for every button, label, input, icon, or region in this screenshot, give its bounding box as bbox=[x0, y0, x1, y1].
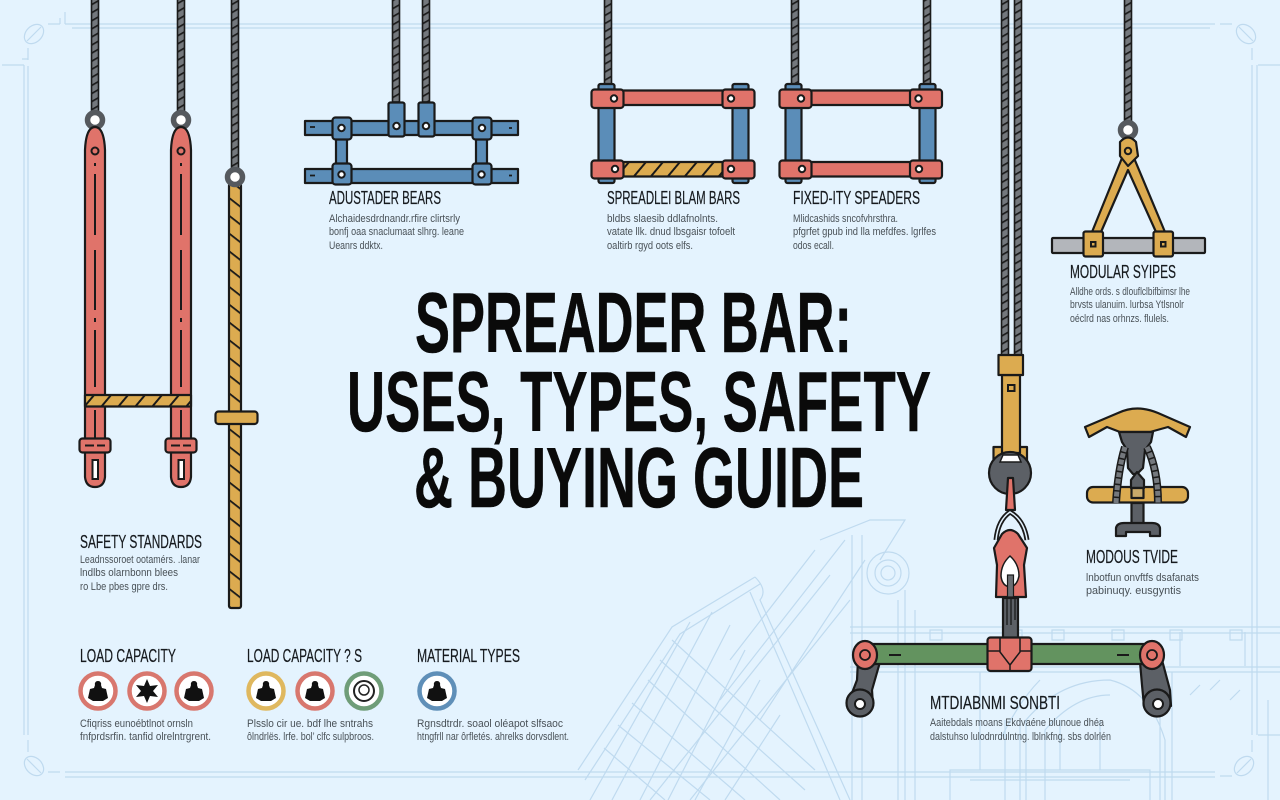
spreader beam bbox=[592, 0, 754, 252]
rope bbox=[604, 0, 612, 84]
label: ADUSTADER BEARS bbox=[329, 188, 441, 208]
description: Ueanrs ddktx. bbox=[329, 240, 383, 252]
centre pin bbox=[1131, 472, 1144, 488]
safety standards block bbox=[80, 532, 202, 593]
description: Leadnssoroet ootamérs. .lanar bbox=[80, 554, 200, 566]
description bbox=[247, 718, 374, 743]
description: lnbotfun onvftfs dsafanats bbox=[1086, 572, 1199, 584]
icon: green badge bbox=[346, 674, 382, 708]
ring bbox=[1120, 122, 1136, 138]
description bbox=[417, 718, 569, 743]
description: Alchaidesdrdnandr.rfire clirtsrly bbox=[329, 213, 460, 225]
description: oéclrd nas orhnzs. flulels. bbox=[1070, 313, 1169, 325]
description bbox=[1086, 572, 1199, 597]
left arm bbox=[847, 660, 880, 706]
icon: gold badge bbox=[248, 674, 284, 708]
bridle legs bbox=[1092, 158, 1165, 232]
description: Alldhe ords. s dlouflclbifbimsr lhe bbox=[1070, 286, 1190, 298]
green beam bbox=[868, 644, 1148, 664]
rope bbox=[1124, 0, 1132, 125]
red hook body bbox=[994, 530, 1027, 597]
description: odos ecall. bbox=[793, 240, 834, 252]
description: bldbs slaesib ddlafnolnts. bbox=[607, 213, 718, 225]
load capacity S block bbox=[247, 646, 382, 743]
twin ropes bbox=[1002, 0, 1022, 356]
description bbox=[793, 213, 936, 252]
hatched cross bar bbox=[85, 395, 191, 406]
frame bbox=[592, 84, 754, 183]
description: brvsts ulanuim. lurbsa Ytlsnolr bbox=[1070, 299, 1184, 311]
frame bbox=[780, 84, 942, 183]
title: USES, TYPES, SAFETY bbox=[347, 355, 931, 450]
fixed spreader bbox=[780, 0, 942, 252]
red centre block bbox=[988, 638, 1032, 671]
gold plate behind bbox=[994, 447, 1027, 461]
description: Aaitebdals moans Ekdvaéne blunoue dhéa bbox=[930, 717, 1105, 729]
icon: figure badge 1 bbox=[80, 674, 116, 708]
label: SPREADLEI BLAM BARS bbox=[607, 188, 740, 208]
left end cap bbox=[853, 641, 877, 669]
description: pfgrfet gpub ind lla mefdfes. lgrlfes bbox=[793, 226, 936, 238]
heading: SAFETY STANDARDS bbox=[80, 532, 202, 552]
red link bbox=[1006, 478, 1015, 510]
gold stem bbox=[1002, 375, 1020, 453]
gold top arch bbox=[1085, 408, 1190, 437]
title bbox=[347, 276, 931, 526]
icon: figure badge 2 bbox=[176, 674, 212, 708]
description bbox=[80, 718, 211, 743]
label: MTDIABNMI SONBTI bbox=[930, 693, 1060, 713]
label: MODULAR SYIPES bbox=[1070, 262, 1176, 282]
title: & BUYING GUIDE bbox=[414, 431, 864, 526]
frame bbox=[305, 102, 518, 184]
description bbox=[607, 213, 735, 252]
description: fnfprdsrfin. tanfid olrelntrgrent. bbox=[80, 731, 211, 743]
heading: LOAD CAPACITY bbox=[80, 646, 176, 666]
left eye bbox=[846, 690, 874, 716]
bridle head bbox=[1120, 138, 1138, 166]
description: Cfiqriss eunoébtlnot ornsln bbox=[80, 718, 193, 730]
description: ro Lbe pbes gpre drs. bbox=[80, 581, 168, 593]
clamps bbox=[1084, 232, 1173, 256]
right eye bbox=[1144, 690, 1170, 716]
description: vatate llk. dnud lbsgaisr tofoelt bbox=[607, 226, 735, 238]
gold rope with toggle bbox=[216, 0, 258, 608]
description: oaltirb rgyd oots elfs. bbox=[607, 240, 693, 252]
modular bridle bbox=[1052, 0, 1205, 325]
description: htngfrll nar ôrfletés. ahrelks dorvsdlent. bbox=[417, 731, 569, 743]
description: pabinuqy. eusgyntis bbox=[1086, 585, 1181, 597]
hanger stem bbox=[1003, 598, 1018, 638]
grey beam bbox=[1052, 238, 1205, 253]
icon: blue badge bbox=[420, 674, 454, 708]
rope: gold lower bbox=[229, 184, 241, 608]
ring bbox=[228, 170, 242, 184]
rope: dark upper bbox=[232, 0, 238, 172]
description: dalstuhso lulodnrdulntng. lblnkfng. sbs dolrlén bbox=[930, 731, 1111, 743]
gold collar bbox=[998, 355, 1023, 375]
shackle bbox=[996, 512, 1027, 540]
adjustable spreader bbox=[305, 0, 518, 252]
right end cap bbox=[1140, 641, 1164, 669]
description: ôlndrlës. lrfe. bol’ clfc sulpbroos. bbox=[247, 731, 374, 743]
description: Mlidcashids sncofvhrsthra. bbox=[793, 213, 898, 225]
sling: right bbox=[166, 127, 196, 487]
description: Rgnsdtrdr. soaol oléapot slfsaoc bbox=[417, 718, 563, 730]
foot bbox=[1116, 523, 1160, 536]
heading: MATERIAL TYPES bbox=[417, 646, 520, 666]
toggle bar bbox=[216, 412, 258, 424]
side cables bbox=[1116, 447, 1158, 503]
grey body bbox=[1119, 432, 1153, 474]
central hook assembly and green beam bbox=[846, 0, 1171, 743]
modous swivel fitting bbox=[1085, 408, 1199, 597]
description bbox=[930, 717, 1111, 743]
title: SPREADER BAR: bbox=[415, 276, 852, 371]
label: FIXED-ITY SPEADERS bbox=[793, 188, 920, 208]
heading: LOAD CAPACITY ? S bbox=[247, 646, 362, 666]
ropes bbox=[392, 0, 430, 102]
rope: left bbox=[92, 0, 98, 116]
load capacity block bbox=[80, 646, 212, 743]
description bbox=[329, 213, 464, 252]
icon: red badge bbox=[298, 674, 332, 708]
material types block bbox=[417, 646, 569, 743]
ring: left bbox=[88, 112, 102, 128]
right arm bbox=[1140, 660, 1171, 706]
swivel disc bbox=[989, 452, 1031, 494]
description bbox=[80, 554, 200, 593]
description: lndlbs olarnbonn blees bbox=[80, 567, 178, 579]
icon: star badge bbox=[130, 674, 164, 708]
description: Plsslo cir ue. bdf lhe sntrahs bbox=[247, 718, 373, 730]
gold bar bbox=[1087, 487, 1188, 502]
ropes bbox=[792, 0, 930, 84]
blueprint machine drawing bbox=[578, 520, 1280, 800]
description: bonfj oaa snaclumaat slhrg. leane bbox=[329, 226, 464, 238]
strap assembly: twin red slings bbox=[80, 0, 196, 487]
description bbox=[1070, 286, 1190, 325]
label: MODOUS TVIDE bbox=[1086, 547, 1178, 567]
rope: middle bbox=[178, 0, 184, 116]
stem bbox=[1132, 503, 1144, 524]
sling: left bbox=[80, 127, 110, 487]
ring: middle bbox=[174, 112, 188, 128]
